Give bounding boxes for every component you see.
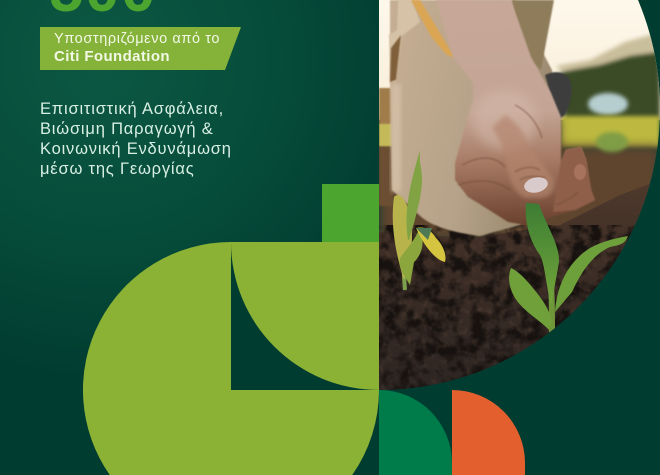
- subtitle text: Κοινωνική Ενδυνάμωση: [40, 140, 232, 158]
- right seedling: [509, 203, 628, 332]
- finger nail: [574, 164, 586, 180]
- boot or dark object: [545, 72, 572, 120]
- sky: [379, 0, 660, 120]
- banner: [40, 27, 241, 70]
- orange quarter shape: [452, 390, 525, 475]
- arm and hand: [436, 0, 595, 225]
- trouser pocket shadow: [390, 35, 401, 82]
- soil highlights: [379, 240, 619, 390]
- back of hand highlight: [473, 90, 537, 150]
- green patch in field: [596, 132, 628, 152]
- distant white tent: [588, 93, 628, 115]
- large lime circle shape: [83, 242, 379, 475]
- subtitle text: Επισιτιστική Ασφάλεια,: [40, 100, 224, 118]
- dark notch in lime shape: [231, 242, 379, 390]
- yellow field: [560, 116, 660, 148]
- tree line: [556, 32, 660, 125]
- photo: hand planting seedlings: [379, 0, 660, 400]
- subtitle text: Βιώσιμη Παραγωγή &: [40, 120, 214, 138]
- thumb: [492, 115, 554, 198]
- banner text: [54, 32, 219, 61]
- trouser shadow: [512, 0, 554, 70]
- backlit arm hair: [411, 0, 455, 58]
- soil ground: [379, 180, 660, 400]
- soil texture: [379, 225, 634, 390]
- trouser lit seam: [391, 84, 401, 192]
- subtitle text: [40, 100, 232, 178]
- blurred soil background: [379, 120, 660, 240]
- knuckle creases: [458, 105, 578, 205]
- curled fingers: [553, 147, 595, 212]
- green quarter shape: [379, 390, 452, 475]
- left seedling: [393, 150, 446, 290]
- far left field strip: [379, 88, 393, 206]
- trouser pocket edge: [389, 0, 420, 82]
- banner text: Citi Foundation: [54, 48, 170, 65]
- subtitle text: μέσω της Γεωργίας: [40, 160, 194, 178]
- square accent: [322, 184, 379, 242]
- thumbnail: [524, 177, 548, 193]
- banner text: Υποστηριζόμενο από το: [54, 31, 220, 47]
- trousers: [390, 0, 560, 236]
